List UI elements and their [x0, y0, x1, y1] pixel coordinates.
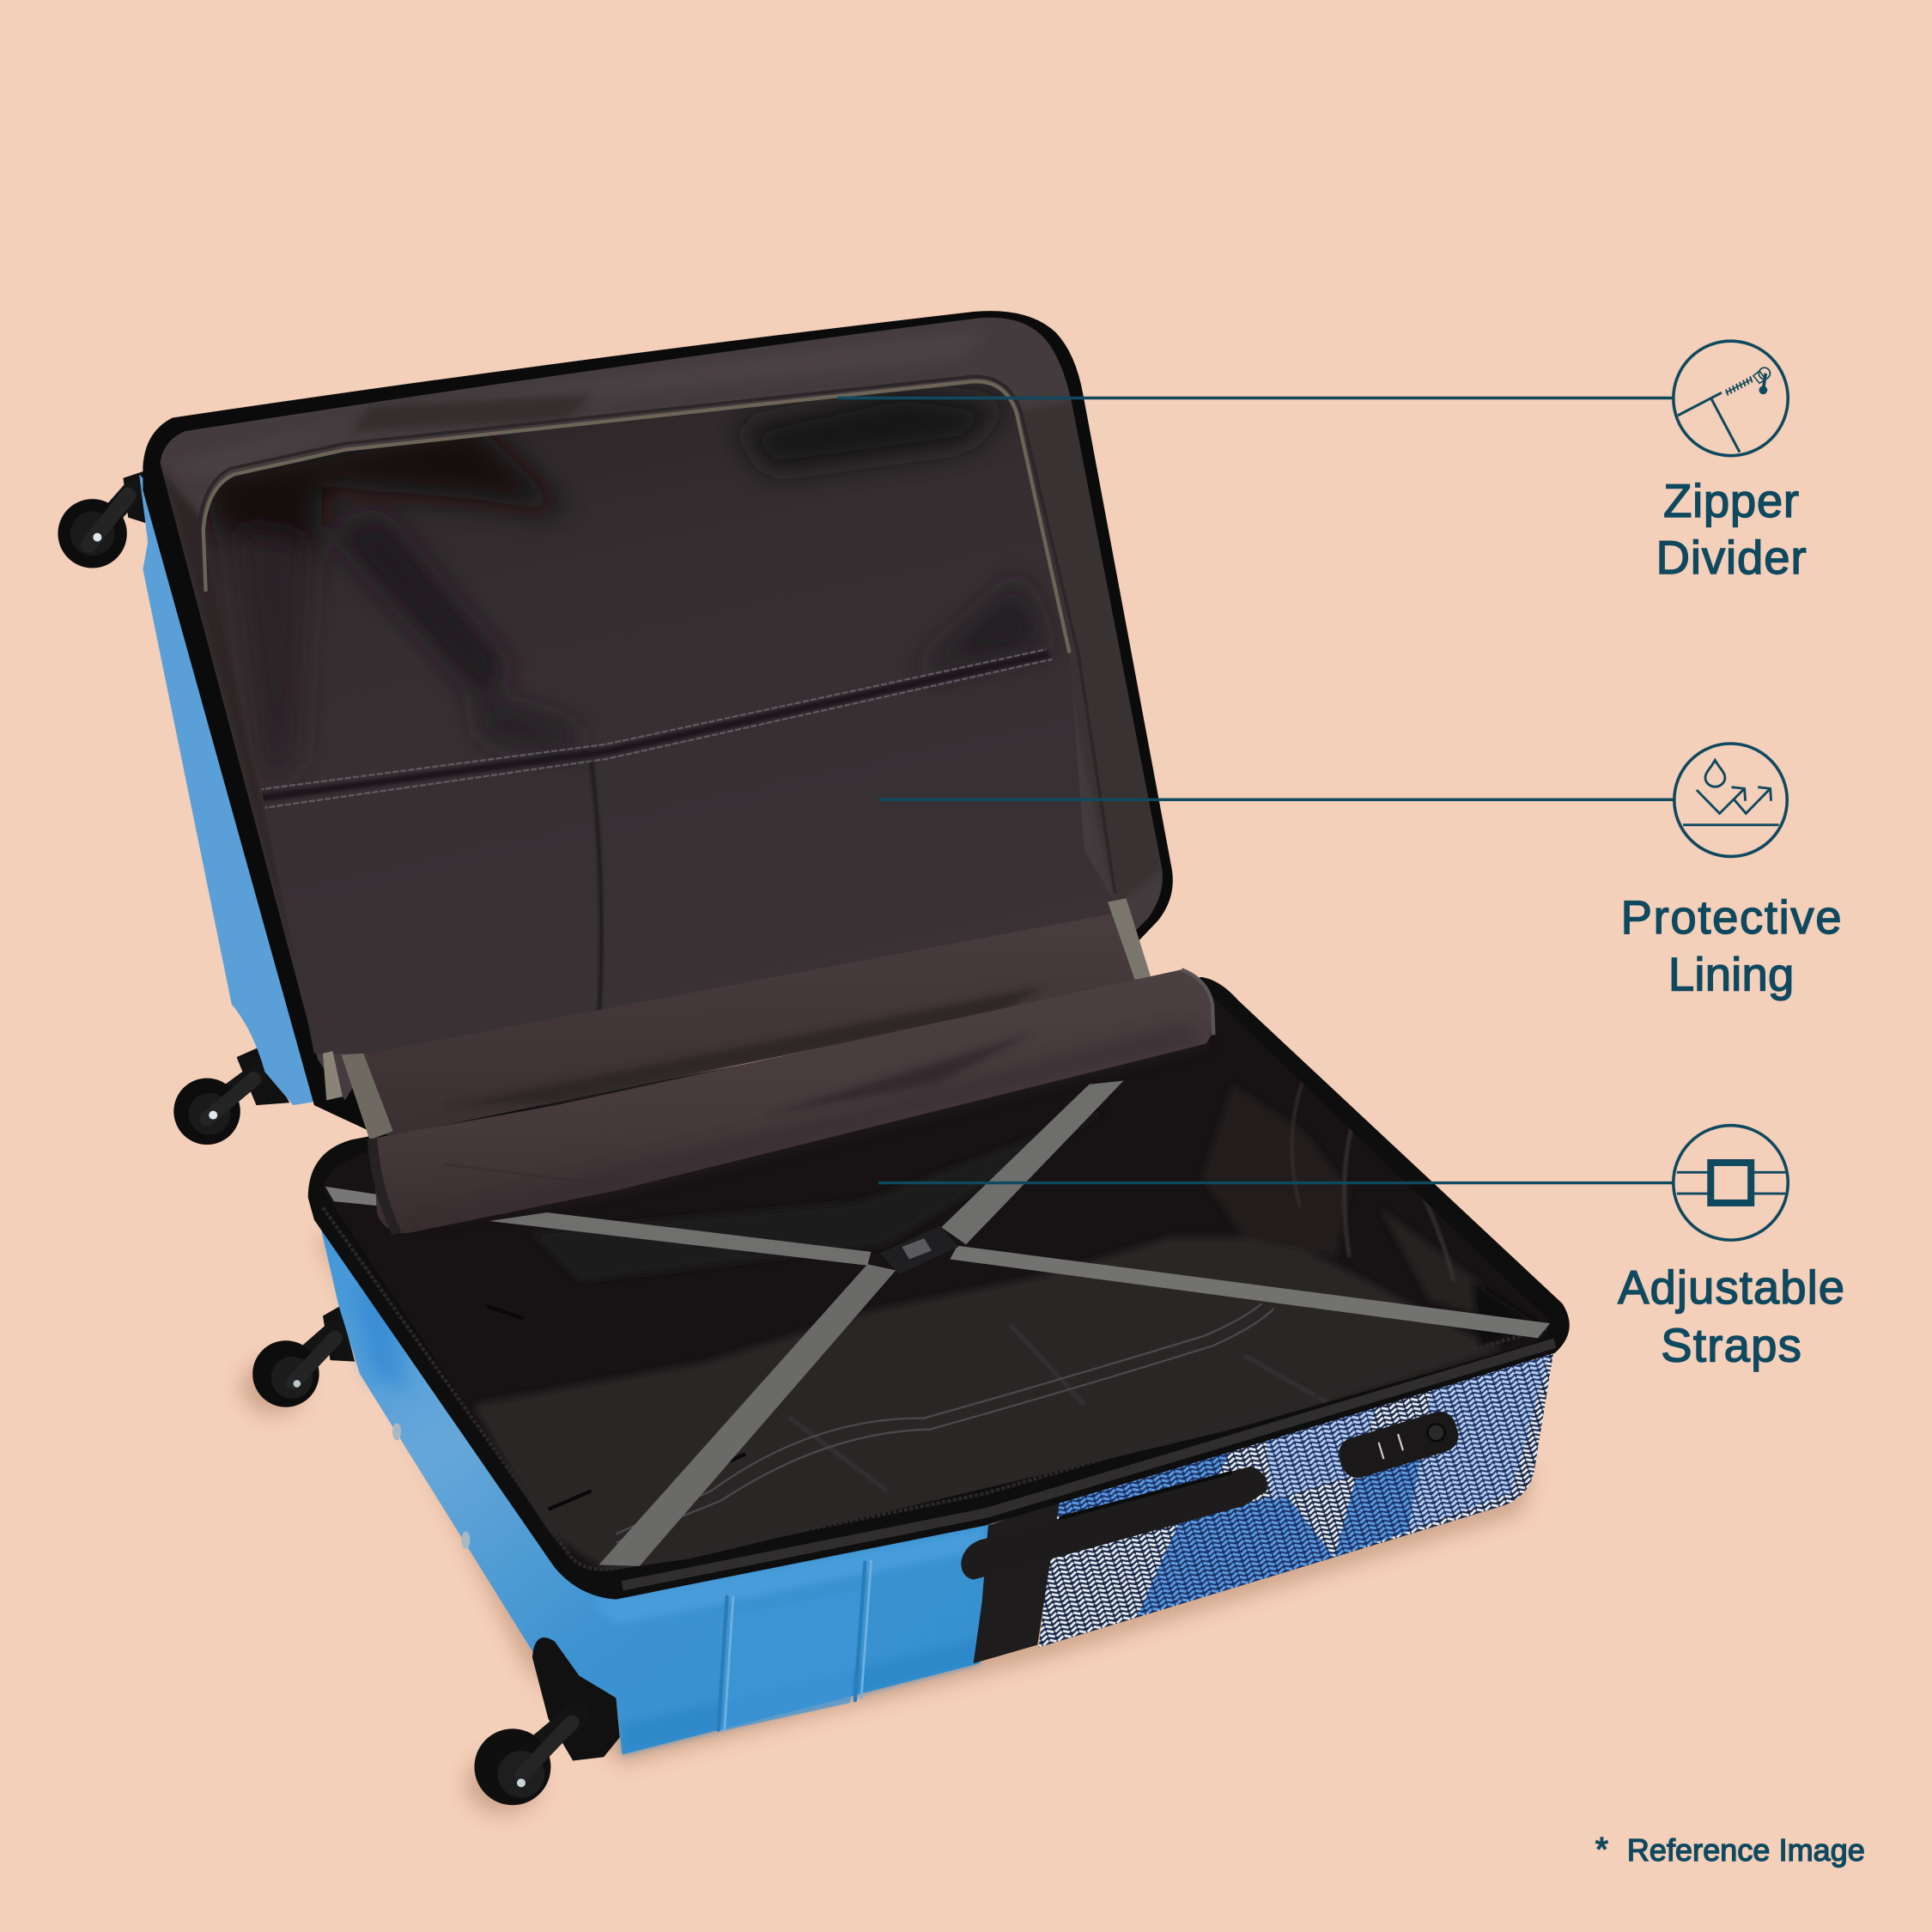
- body ribs: [719, 1561, 872, 1730]
- heading: protective lining: [1621, 891, 1842, 1001]
- fold highlights: [788, 1072, 1454, 1491]
- divider rear flap: [349, 914, 1152, 1136]
- combination lock: [1335, 1407, 1462, 1482]
- pocket fold: [592, 762, 601, 1023]
- heading: zipper divider: [1656, 475, 1807, 584]
- heading: protective lining: Lining: [1668, 949, 1794, 1001]
- pocket seam: [258, 649, 1046, 790]
- wheel: top left: [58, 471, 148, 568]
- lower shell rim: [308, 977, 1570, 1600]
- lower compartment lining: [471, 1080, 1504, 1571]
- upper shell lining border: [161, 318, 1163, 1100]
- callout lines: [838, 398, 1676, 1183]
- upper shell blue edge: [139, 474, 323, 1105]
- icon: protective lining: [1674, 744, 1787, 856]
- wheel: middle left: [173, 1048, 289, 1145]
- wheel: lower left: [252, 1306, 355, 1407]
- strap buckle: [880, 1226, 958, 1274]
- flap hinge right: [1108, 898, 1151, 980]
- footnote: Reference Image: [1627, 1833, 1865, 1868]
- lid folds: [197, 391, 1048, 782]
- flap hinge left: [341, 1054, 393, 1139]
- rolled divider: [372, 969, 1215, 1233]
- wheel and bracket: front: [474, 1637, 620, 1805]
- callout: protective lining: [1621, 744, 1842, 1001]
- soft ground shadow: [241, 1232, 1534, 1814]
- side handle: [961, 1467, 1267, 1580]
- lining border shading: [161, 331, 1164, 1060]
- icon: zipper divider: [1674, 341, 1788, 456]
- heading: zipper divider: Zipper: [1663, 475, 1799, 527]
- blue body shading: [351, 1281, 986, 1754]
- inner zip seam: [204, 381, 1070, 653]
- zipper pull: [323, 1051, 343, 1100]
- rivets: [392, 1423, 470, 1549]
- upper shell rim: [143, 311, 1173, 1131]
- pocket seam lower: [261, 659, 1052, 808]
- seam creases: [487, 1306, 745, 1510]
- zipper track: [323, 1207, 1546, 1570]
- lower shell blue body: [320, 1220, 992, 1754]
- compression straps: [325, 1080, 1550, 1566]
- rim highlight band: [623, 1343, 1555, 1586]
- lining seams: [616, 1303, 1274, 1543]
- heading: adjustable straps: Adjustable: [1618, 1261, 1844, 1314]
- icon: adjustable straps: [1674, 1126, 1788, 1240]
- patterned shell panel: [1039, 1353, 1553, 1647]
- callout: zipper divider: [1656, 341, 1807, 584]
- heading: zipper divider: Divider: [1656, 532, 1807, 584]
- inner seam dark: [198, 376, 1115, 893]
- suitcase photo: [58, 311, 1676, 1814]
- heading: adjustable straps: [1618, 1261, 1844, 1372]
- heading: protective lining: Protective: [1621, 891, 1842, 944]
- upper compartment lining: [197, 376, 1115, 1054]
- lining folds: [473, 1084, 1540, 1577]
- black corner guard: [974, 1501, 1060, 1663]
- heading: adjustable straps: Straps: [1661, 1320, 1801, 1372]
- callout: adjustable straps: [1618, 1126, 1844, 1372]
- footnote: *: [1595, 1832, 1608, 1868]
- pocket band: [258, 654, 1048, 799]
